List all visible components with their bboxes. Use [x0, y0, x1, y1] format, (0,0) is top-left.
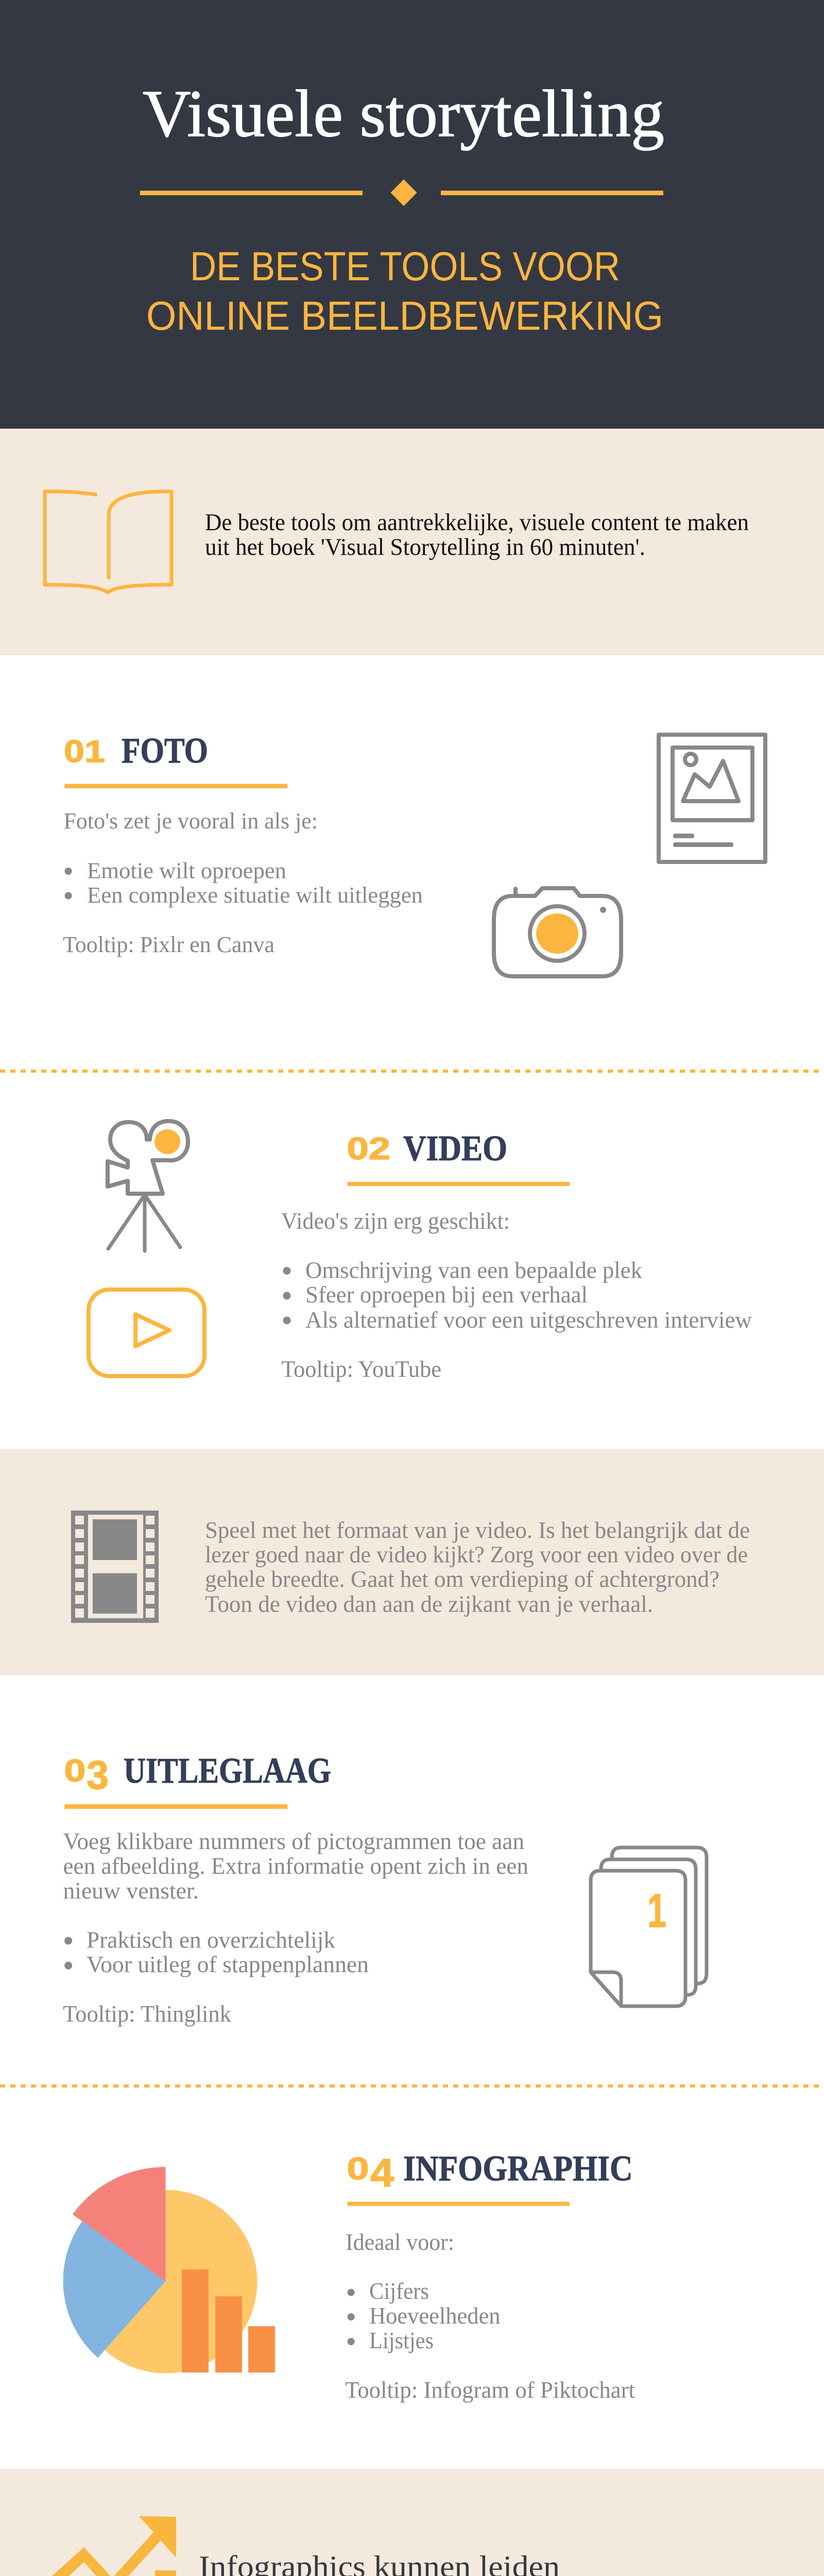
text block: uitleglaag: Voeg klikbare nummers of pictogrammen toe aan — [63, 1828, 524, 1854]
heading: 04 infographic: 4 — [370, 2151, 394, 2195]
text block: uitleglaag: Tooltip: Thinglink — [63, 2001, 231, 2027]
tip text — [205, 1517, 750, 1617]
intro text — [205, 509, 749, 561]
icon: book — [45, 492, 171, 592]
dashed separators — [0, 1071, 824, 2576]
tip text: Toon de video dan aan de zijkant van je verhaal. — [205, 1591, 653, 1617]
panel: video format tip — [0, 1449, 824, 1675]
icon: film strip — [71, 1511, 159, 1623]
icon: play button — [89, 1290, 204, 1376]
subtitle — [146, 243, 663, 338]
text block: infographic: Ideaal voor: — [346, 2229, 454, 2255]
panel: 03 uitleglaag — [0, 1675, 824, 2086]
text block: foto: Emotie wilt oproepen — [87, 858, 286, 883]
text block: video: Video's zijn erg geschikt: — [281, 1208, 510, 1234]
heading: 04 infographic — [347, 2149, 632, 2206]
heading: 04 infographic: INFOGRAPHIC — [403, 2149, 632, 2189]
panel: infographic fact — [0, 2469, 824, 2576]
chart: pie with bars — [63, 2167, 275, 2373]
heading: 03 uitleglaag: 0 — [64, 1754, 85, 1788]
icon: camera — [494, 888, 621, 976]
icon: numbered pages: 1 — [647, 1885, 666, 1937]
heading: 02 video: 02 — [347, 1131, 390, 1166]
heading: 01 foto: FOTO — [122, 731, 208, 771]
tip text: lezer goed naar de video kijkt? Zorg voor een video over de — [205, 1541, 748, 1567]
heading: 02 video — [347, 1129, 570, 1186]
text block: foto: Foto's zet je vooral in als je: — [64, 808, 318, 834]
text block: video: Sfeer oproepen bij een verhaal — [305, 1281, 588, 1308]
text block: video — [281, 1208, 752, 1382]
text block: video: Tooltip: YouTube — [281, 1356, 441, 1382]
text block: infographic: Tooltip: Infogram of Piktochart — [345, 2377, 635, 2403]
intro text: uit het boek 'Visual Storytelling in 60 minuten'. — [205, 534, 645, 561]
heading: 03 uitleglaag: UITLEGLAAG — [124, 1751, 331, 1791]
text block: foto — [63, 808, 423, 957]
title: Visuele storytelling — [143, 77, 664, 151]
heading: 01 foto — [64, 731, 287, 788]
heading: 03 uitleglaag: 3 — [87, 1752, 109, 1798]
panel: 02 video — [0, 1071, 824, 1449]
text block: foto: Een complexe situatie wilt uitleggen — [87, 883, 423, 908]
tip text: gehele breedte. Gaat het om verdieping of achtergrond? — [205, 1566, 719, 1592]
tip text: Speel met het formaat van je video. Is het belangrijk dat de — [205, 1517, 750, 1543]
text block: infographic: Hoeveelheden — [369, 2302, 501, 2329]
text block: uitleglaag: Praktisch en overzichtelijk — [87, 1927, 335, 1953]
icon: growth chart — [41, 2516, 176, 2576]
text block: uitleglaag: een afbeelding. Extra informatie opent zich in een — [63, 1853, 528, 1879]
heading: 01 foto: 01 — [64, 734, 105, 769]
icon: movie camera — [108, 1121, 188, 1251]
text block: infographic: Lijstjes — [369, 2327, 434, 2353]
panel: header — [0, 0, 824, 429]
text block: uitleglaag: Voor uitleg of stappenplannen — [87, 1951, 369, 1977]
panel: intro — [0, 429, 824, 655]
heading: 04 infographic: 0 — [347, 2151, 369, 2186]
text block: uitleglaag — [63, 1828, 528, 2027]
text block: infographic — [345, 2229, 635, 2403]
text block: infographic: Cijfers — [369, 2278, 429, 2304]
icon: photo — [659, 735, 765, 862]
text block: foto: Tooltip: Pixlr en Canva — [63, 932, 274, 957]
icon: numbered pages — [591, 1848, 707, 2006]
subtitle: ONLINE BEELDBEWERKING — [146, 293, 663, 338]
panel: 04 infographic — [0, 2086, 824, 2469]
heading: 02 video: VIDEO — [403, 1129, 507, 1168]
subtitle: DE BESTE TOOLS VOOR — [190, 243, 620, 289]
divider with diamond — [140, 179, 663, 206]
text block: video: Omschrijving van een bepaalde plek — [305, 1257, 642, 1283]
text block: video: Als alternatief voor een uitgeschreven interview — [305, 1307, 752, 1333]
panel: 01 foto — [0, 655, 824, 1071]
intro text: De beste tools om aantrekkelijke, visuele content te maken — [205, 509, 749, 536]
text block: uitleglaag: nieuw venster. — [63, 1877, 199, 1904]
heading: 03 uitleglaag — [64, 1751, 331, 1809]
